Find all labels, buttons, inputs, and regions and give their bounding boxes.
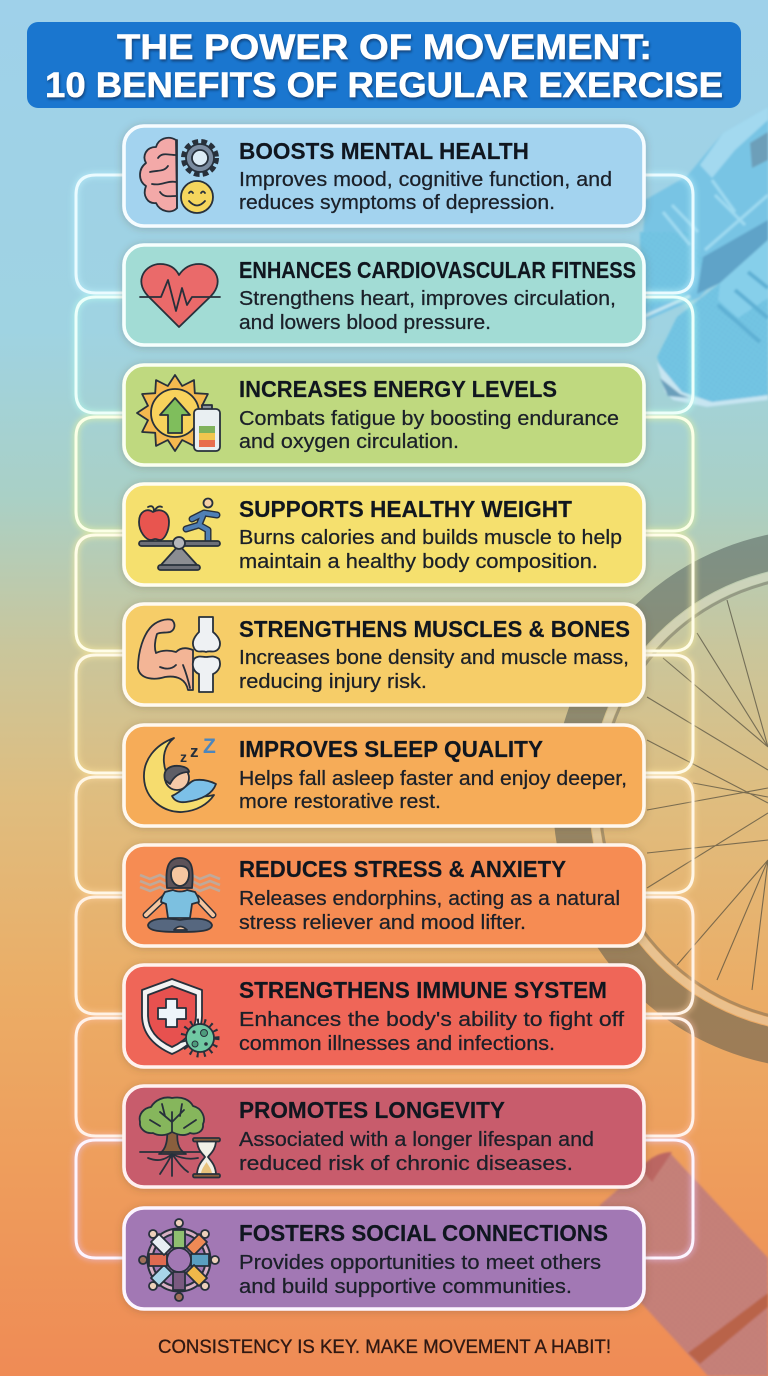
description: Strengthens heart, improves circulation, [239, 288, 616, 310]
heading: STRENGTHENS MUSCLES & BONES [239, 616, 630, 642]
description: Provides opportunities to meet others [239, 1252, 601, 1274]
panel: increases energy levels [124, 365, 644, 465]
icon: meditating person [140, 858, 220, 932]
panel: boosts mental health [124, 126, 644, 226]
description: Combats fatigue by boosting endurance [239, 408, 619, 430]
icon: heart with pulse [140, 264, 220, 327]
description: Burns calories and builds muscle to help [239, 527, 622, 549]
icon: sleeping on a moon: z [180, 749, 187, 765]
panel: promotes longevity [124, 1086, 644, 1187]
description: and build supportive communities. [239, 1276, 572, 1298]
icon: sleeping on a moon: Z [203, 735, 216, 758]
panel: supports healthy weight [124, 484, 644, 585]
heading: INCREASES ENERGY LEVELS [239, 376, 557, 402]
description: Improves mood, cognitive function, and [239, 169, 612, 191]
description [239, 768, 627, 813]
description [239, 1129, 594, 1175]
description: Increases bone density and muscle mass, [239, 647, 629, 669]
title line 1: THE POWER OF MOVEMENT: [117, 28, 652, 67]
panel: improves sleep quality [124, 725, 644, 826]
description [239, 1252, 601, 1298]
heading: REDUCES STRESS & ANXIETY [239, 856, 566, 882]
description [239, 169, 612, 214]
description: and lowers blood pressure. [239, 312, 491, 334]
panel: strengthens muscles and bones [124, 604, 644, 705]
footer tagline: CONSISTENCY IS KEY. MAKE MOVEMENT A HABIT! [158, 1337, 611, 1358]
description: reduced risk of chronic diseases. [239, 1153, 573, 1175]
description: more restorative rest. [239, 791, 441, 813]
description: and oxygen circulation. [239, 431, 459, 453]
icon: shield and virus [142, 979, 217, 1055]
description: Enhances the body's ability to fight off [239, 1009, 625, 1031]
title banner [27, 22, 741, 108]
connector glow [76, 175, 693, 1258]
heading: PROMOTES LONGEVITY [239, 1097, 505, 1123]
background image: rolled yoga mat [600, 1152, 768, 1376]
icon: tree and hourglass [140, 1097, 220, 1178]
description: reducing injury risk. [239, 671, 427, 693]
icon: flexed arm and bone joint [138, 617, 220, 692]
description [239, 1009, 625, 1055]
description [239, 288, 616, 334]
description: Helps fall asleep faster and enjoy deeper, [239, 768, 627, 790]
icon: circle of people [139, 1219, 219, 1301]
description: common illnesses and infections. [239, 1033, 555, 1055]
panel: fosters social connections [124, 1208, 644, 1309]
panel: reduces stress and anxiety [124, 845, 644, 946]
description [239, 888, 620, 934]
description: maintain a healthy body composition. [239, 551, 598, 573]
title line 2: 10 BENEFITS OF REGULAR EXERCISE [45, 66, 723, 105]
description [239, 408, 619, 453]
description: Releases endorphins, acting as a natural [239, 888, 620, 910]
panel: enhances cardiovascular fitness [124, 245, 644, 345]
icon: sleeping on a moon: z [190, 742, 198, 761]
heading: ENHANCES CARDIOVASCULAR FITNESS [239, 257, 636, 283]
icon: sleeping on a moon [144, 735, 216, 812]
description: stress reliever and mood lifter. [239, 912, 526, 934]
heading: FOSTERS SOCIAL CONNECTIONS [239, 1220, 608, 1246]
heading: BOOSTS MENTAL HEALTH [239, 138, 529, 164]
background image: bicycle wheel [571, 547, 768, 1051]
description: reduces symptoms of depression. [239, 192, 555, 214]
icon: sun and battery [137, 375, 220, 451]
heading: IMPROVES SLEEP QUALITY [239, 736, 543, 762]
heading: SUPPORTS HEALTHY WEIGHT [239, 496, 572, 522]
background image: running shoes [640, 107, 768, 407]
panel: strengthens immune system [124, 965, 644, 1067]
connectors [76, 175, 693, 1258]
description [239, 647, 629, 693]
icon: apple and runner on a balance [139, 498, 220, 570]
heading: STRENGTHENS IMMUNE SYSTEM [239, 977, 607, 1003]
description: Associated with a longer lifespan and [239, 1129, 594, 1151]
icon: brain, gear and smile [140, 138, 216, 213]
description [239, 527, 622, 573]
